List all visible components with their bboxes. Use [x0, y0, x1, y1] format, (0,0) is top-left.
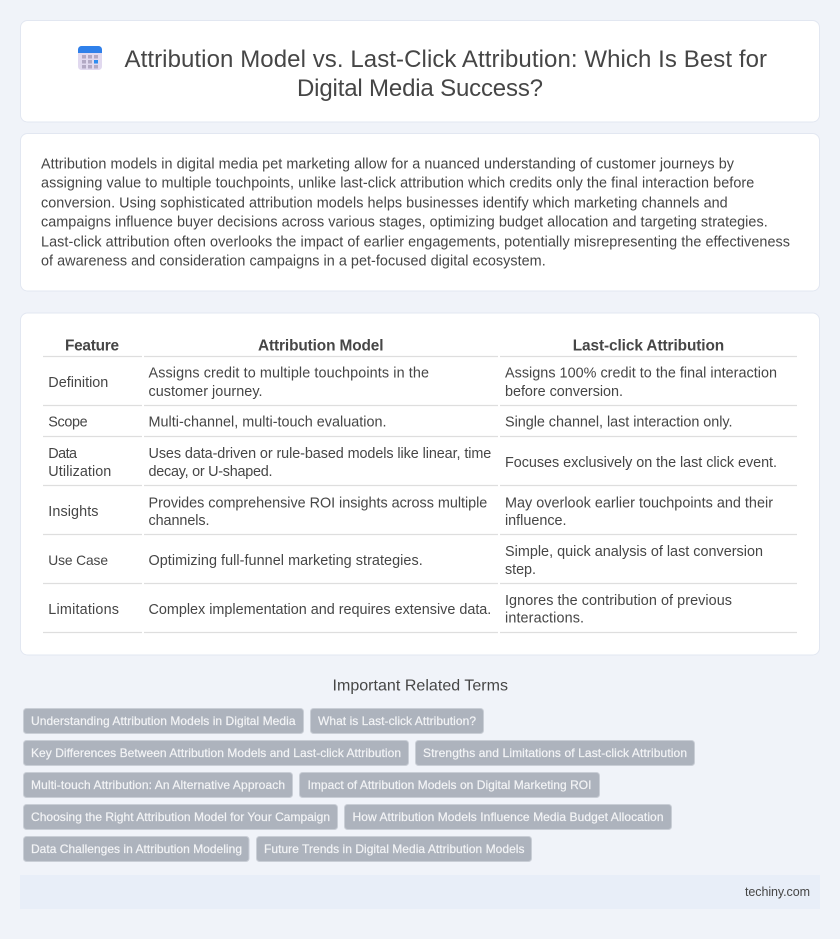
table row: scope: Scope	[48, 415, 88, 431]
text block: introduction paragraph: assigning value to multiple touchpoints, unlike last-click attribution which credits only the final interaction before	[41, 176, 754, 192]
text block: introduction paragraph: Last-click attribution often overlooks the impact of earlier engagements, potentially misrepresenting the effectiveness	[41, 234, 790, 250]
tag: Future Trends in Digital Media Attribution Models	[264, 842, 524, 856]
tag	[24, 772, 292, 798]
table row: insights: channels.	[148, 513, 210, 529]
table row: insights	[48, 495, 773, 529]
table row: insights: Insights	[48, 504, 98, 520]
table row: definition: Assigns credit to multiple touchpoints in the	[148, 366, 429, 382]
table row: scope	[48, 415, 733, 431]
table row: use case: step.	[505, 562, 536, 578]
heading: important related terms: Important Related Terms	[332, 678, 508, 695]
table row: use case: Simple, quick analysis of last conversion	[505, 544, 763, 560]
tag: Understanding Attribution Models in Digital Media	[31, 714, 296, 728]
table row: insights: Provides comprehensive ROI insights across multiple	[148, 495, 487, 511]
table row: insights: May overlook earlier touchpoints and their	[505, 495, 773, 511]
text block: introduction paragraph	[41, 156, 790, 269]
text block: introduction paragraph: conversion. Using sophisticated attribution models helps businesses identify which marketing channels and	[41, 195, 728, 211]
table row: definition: before conversion.	[505, 384, 623, 400]
panel: comparison table	[20, 313, 820, 655]
table row: insights: influence.	[505, 513, 566, 529]
tag: Data Challenges in Attribution Modeling	[31, 842, 242, 856]
table row: limitations: interactions.	[505, 611, 584, 627]
text block: introduction paragraph: Attribution models in digital media pet marketing allow for a nuanced understanding of customer journeys by	[41, 156, 735, 172]
table row: data utilization: Uses data-driven or rule-based models like linear, time	[148, 446, 491, 462]
title: Attribution Model vs. Last-Click Attribution: Which Is Best for	[124, 46, 767, 73]
table row: use case: Use Case	[48, 553, 108, 568]
panel: header	[20, 20, 820, 122]
table row: limitations: Complex implementation and requires extensive data.	[148, 602, 491, 618]
tag	[256, 836, 532, 862]
tag	[24, 804, 338, 830]
table header	[65, 338, 724, 355]
tag	[416, 740, 694, 766]
table row: data utilization: Focuses exclusively on the last click event.	[505, 455, 777, 471]
footer	[20, 875, 820, 909]
table row: limitations: Ignores the contribution of previous	[505, 593, 732, 609]
table row: use case	[48, 544, 763, 578]
text block: introduction paragraph: campaigns influence buyer decisions across various stages, optimizing budget allocation and targeting strategies.	[41, 215, 768, 231]
table row: definition: Assigns 100% credit to the final interaction	[505, 366, 777, 382]
table row: scope: Multi-channel, multi-touch evaluation.	[148, 415, 386, 431]
tag	[300, 772, 600, 798]
tag: How Attribution Models Influence Media Budget Allocation	[352, 810, 664, 824]
tag	[344, 804, 672, 830]
panel: related term tags	[24, 708, 694, 862]
tag	[310, 708, 484, 734]
tag	[24, 836, 249, 862]
table row: use case: Optimizing full-funnel marketing strategies.	[148, 553, 423, 569]
tag: Choosing the Right Attribution Model for Your Campaign	[31, 810, 330, 824]
table row: data utilization: decay, or U-shaped.	[148, 464, 272, 480]
table row: definition: customer journey.	[148, 384, 262, 400]
table row: data utilization: Data	[48, 446, 77, 462]
tag: Key Differences Between Attribution Models and Last-click Attribution	[31, 746, 401, 760]
table header: Feature	[65, 338, 119, 355]
table row: definition: Definition	[48, 375, 108, 391]
tag: What is Last-click Attribution?	[318, 714, 476, 728]
table header: Last-click Attribution	[573, 338, 724, 355]
tag	[24, 740, 408, 766]
table row: scope: Single channel, last interaction only.	[505, 415, 732, 431]
table row: limitations: Limitations	[48, 602, 119, 618]
icon: calendar	[78, 46, 102, 70]
footer: techiny.com	[745, 885, 810, 899]
tag: Strengths and Limitations of Last-click Attribution	[423, 746, 687, 760]
table row: data utilization: Utilization	[48, 464, 111, 480]
table row: limitations	[48, 593, 732, 627]
title: Digital Media Success?	[297, 75, 543, 102]
tag: Impact of Attribution Models on Digital Marketing ROI	[308, 778, 592, 792]
tag	[24, 708, 304, 734]
title	[124, 46, 767, 102]
text block: introduction paragraph: of awareness and consideration campaigns in a pet-focused digital ecosystem.	[41, 253, 546, 269]
panel: introduction	[20, 134, 820, 291]
tag: Multi-touch Attribution: An Alternative Approach	[31, 778, 285, 792]
table header: Attribution Model	[258, 338, 384, 355]
table row: definition	[48, 366, 777, 400]
table row: data utilization	[48, 446, 777, 480]
